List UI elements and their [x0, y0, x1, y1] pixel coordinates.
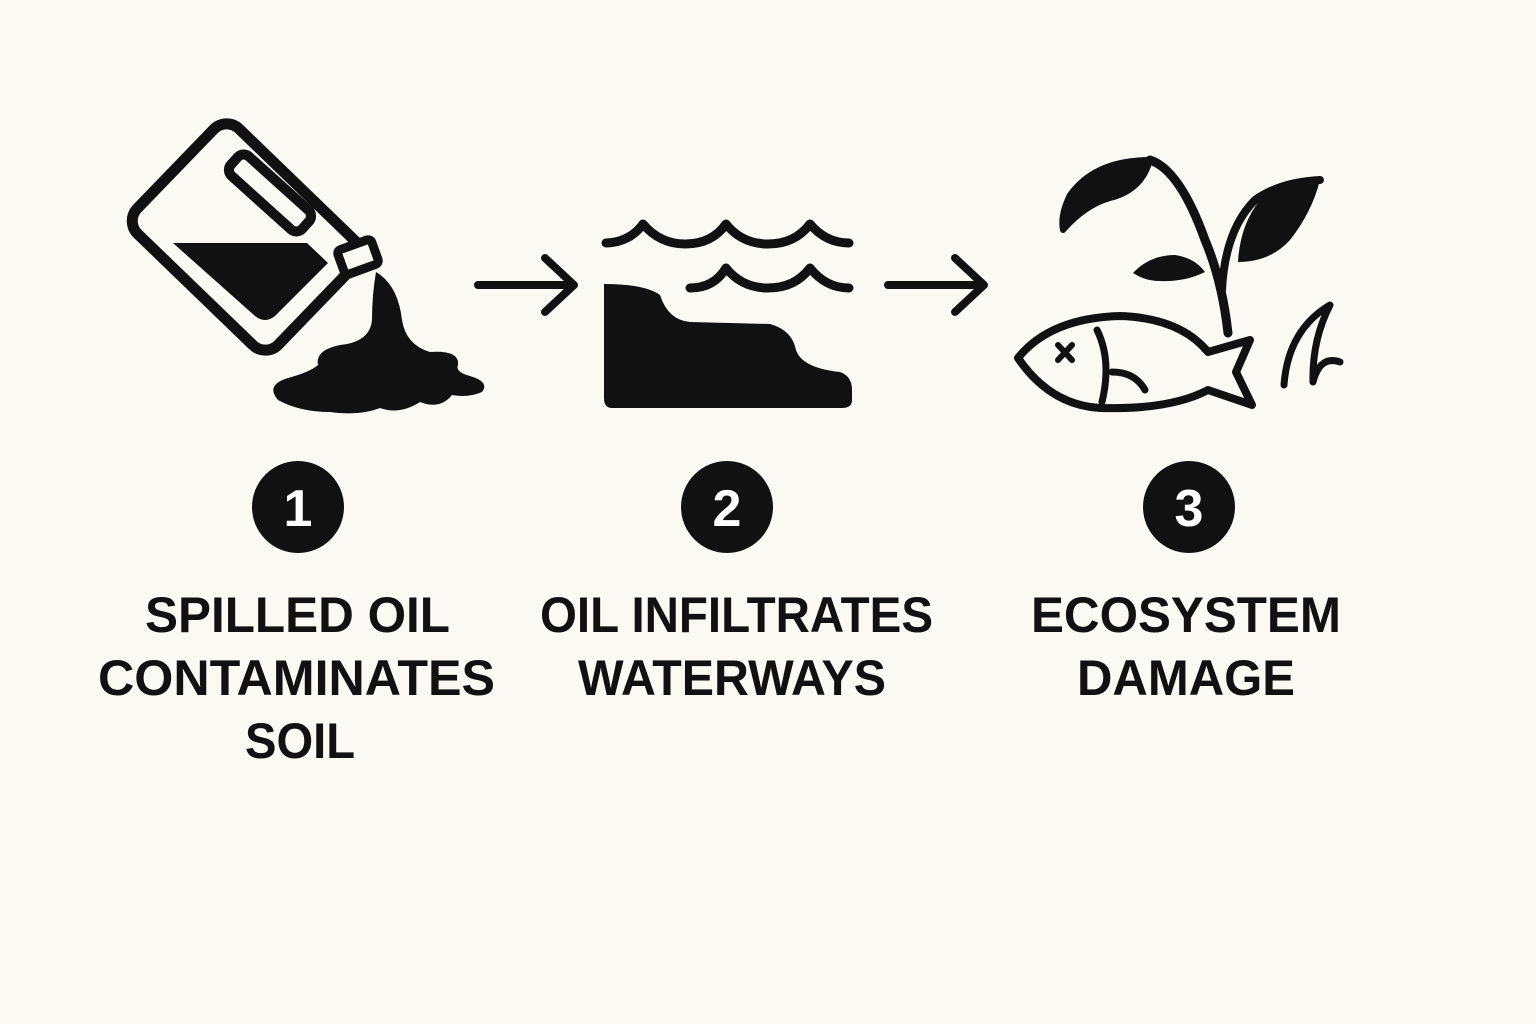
step 2 number	[681, 461, 773, 553]
step 1 label: SOIL	[245, 713, 355, 769]
step 1 number: 1	[284, 480, 312, 538]
step 3 label: DAMAGE	[1077, 650, 1295, 706]
step 3 label: ECOSYSTEM	[1031, 587, 1341, 643]
step 3 number	[1143, 461, 1235, 553]
step 2 number: 2	[713, 480, 741, 538]
step 2 label: WATERWAYS	[578, 650, 886, 706]
arrow 2	[888, 258, 984, 312]
step 1 label: CONTAMINATES	[98, 650, 495, 706]
step 1 label	[98, 587, 495, 769]
step 1 number	[252, 461, 344, 553]
icon: ecosystem (plant, dead fish, grass)	[1018, 160, 1340, 408]
icon: oil canister pouring	[125, 116, 484, 413]
icon: waterways	[604, 224, 852, 408]
step 2 label: OIL INFILTRATES	[540, 587, 933, 643]
step 3 number: 3	[1175, 480, 1203, 538]
step 1 label: SPILLED OIL	[145, 587, 450, 643]
arrow 1	[478, 258, 574, 312]
step 3 label	[1031, 587, 1341, 706]
step 2 label	[540, 587, 933, 706]
